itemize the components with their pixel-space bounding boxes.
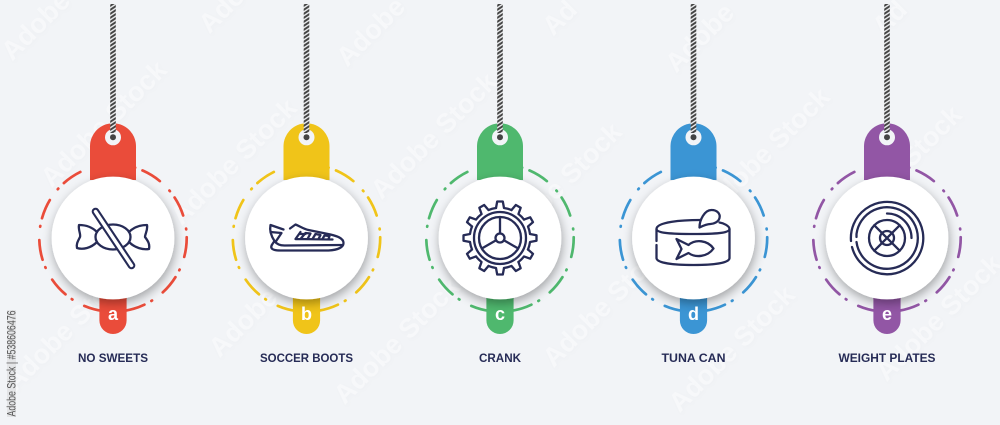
bottom tab: [293, 290, 320, 334]
dashed ring: [403, 141, 597, 335]
bottom tab: [99, 290, 127, 334]
letter c: c: [495, 304, 505, 324]
watermark: Adobe Stock: [203, 224, 341, 363]
top tag: [864, 123, 910, 180]
hole: [686, 129, 702, 145]
card a: no sweets: [16, 4, 210, 365]
knot: [884, 134, 890, 140]
icon: no sweets candy: [77, 212, 149, 266]
white circle: [245, 177, 368, 299]
letter b: b: [301, 304, 312, 324]
rope: [884, 4, 890, 133]
rope: [497, 4, 503, 133]
rope: [304, 4, 309, 133]
top tag: [670, 123, 716, 180]
icon: tuna can: [656, 210, 730, 265]
card c: crank: [403, 4, 597, 365]
hole: [105, 129, 121, 145]
watermark: Adobe Stock: [490, 116, 628, 255]
bottom tab: [680, 290, 707, 334]
dashed ring: [16, 141, 210, 335]
knot: [110, 134, 116, 140]
bottom tab: [486, 290, 514, 334]
watermark: Adobe Stock: [0, 258, 137, 397]
dashed ring: [790, 141, 984, 335]
card b: soccer boots: [209, 4, 404, 365]
watermark: Adobe Stock: [537, 234, 675, 373]
label: TUNA CAN: [662, 351, 726, 365]
knot: [690, 134, 696, 140]
letter a: a: [108, 304, 119, 324]
bottom tab: [873, 290, 901, 334]
watermark: Adobe Stock: [35, 54, 173, 193]
knot: [497, 134, 503, 140]
hole: [879, 129, 895, 145]
label: SOCCER BOOTS: [260, 351, 353, 365]
icon: weight plate: [851, 202, 923, 274]
hole: [492, 129, 508, 145]
stock id label: Adobe Stock | #538606476: [7, 310, 19, 416]
icon: soccer boot: [270, 224, 344, 250]
rope: [691, 4, 696, 133]
label: NO SWEETS: [78, 351, 148, 365]
letter d: d: [688, 304, 699, 324]
watermark: Adobe Stock: [830, 99, 968, 238]
top tag: [284, 123, 330, 180]
dashed ring: [209, 141, 404, 335]
watermark: Adobe Stock: [365, 66, 503, 205]
white circle: [439, 177, 561, 299]
white circle: [826, 177, 948, 299]
card e: weight plates: [790, 4, 984, 365]
letter e: e: [882, 304, 892, 324]
rope: [110, 4, 116, 133]
hole: [298, 129, 314, 145]
icon: crank gear: [463, 201, 537, 275]
label: CRANK: [479, 351, 521, 365]
white circle: [632, 177, 755, 299]
top tag: [90, 123, 136, 180]
card d: tuna can: [596, 4, 791, 365]
watermark: Adobe Stock: [698, 81, 836, 220]
label: WEIGHT PLATES: [838, 351, 936, 365]
watermark: Adobe Stock: [663, 279, 801, 418]
watermark: Adobe Stock: [328, 271, 466, 410]
top tag: [477, 123, 523, 180]
dashed ring: [596, 141, 791, 335]
knot: [304, 134, 310, 140]
watermark: Adobe Stock: [165, 92, 303, 231]
white circle: [52, 177, 174, 299]
